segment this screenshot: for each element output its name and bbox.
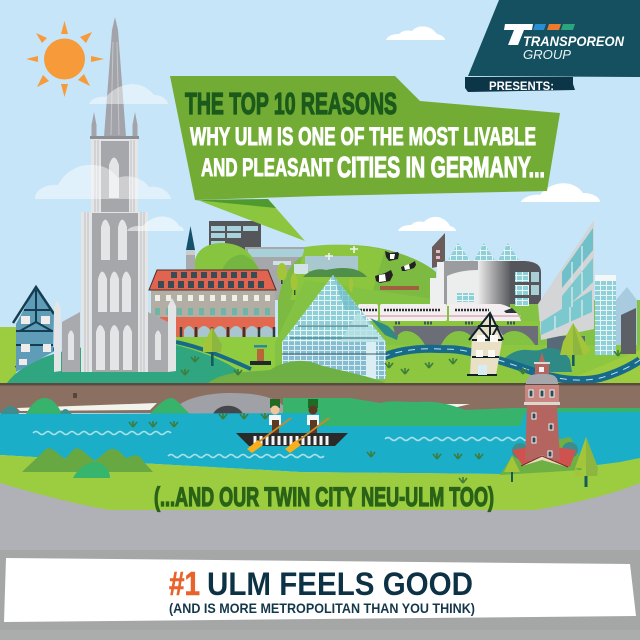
cows on the hill (375, 251, 416, 283)
wave lines (33, 432, 529, 458)
olive bushes left bank (22, 448, 153, 478)
Ulm Minster cathedral (54, 17, 176, 372)
rower (307, 399, 319, 434)
central modern building (430, 233, 541, 307)
lighthouse (500, 352, 582, 475)
half-timbered house left (13, 287, 54, 372)
mid green ground (0, 280, 640, 383)
cloud (398, 217, 456, 231)
road and trees midground (383, 323, 640, 380)
tree and small boat by the church (203, 327, 271, 366)
tuft on near bank (459, 477, 467, 483)
side naves (54, 298, 176, 372)
near bank of the river at the right (320, 412, 525, 426)
spire (90, 17, 139, 139)
stone wall (0, 383, 640, 413)
green hills front of church (7, 342, 385, 383)
cloud (127, 216, 184, 231)
number one: #1 (169, 565, 200, 602)
lower tower (81, 212, 148, 372)
far river bank (0, 398, 640, 414)
stone arch bridge (173, 393, 290, 414)
icon: logo mark (504, 24, 575, 45)
upper tower (91, 139, 138, 213)
half-timbered house centre (467, 313, 503, 375)
plant tufts on the meadow (181, 350, 622, 375)
small church spire (186, 226, 195, 275)
cloud (386, 26, 445, 40)
river (0, 412, 640, 474)
cloud (521, 183, 600, 202)
small trees on hill (277, 263, 353, 295)
cloud (89, 84, 168, 104)
presents ribbon (465, 77, 575, 93)
palace building (149, 270, 276, 338)
tree near lighthouse (504, 437, 598, 487)
wind turbines (325, 246, 358, 260)
background tower buildings (595, 275, 637, 355)
fence (380, 286, 419, 290)
headline: ULM FEELS GOOD (207, 566, 473, 602)
speech banner (170, 76, 560, 241)
white river strips (17, 403, 470, 411)
logo panel (468, 0, 640, 77)
subheadline: (AND IS MORE METROPOLITAN THAN YOU THINK) (169, 600, 475, 616)
icon: sun (26, 21, 104, 97)
cloud (35, 165, 171, 199)
line three: AND PLEASANT (201, 154, 333, 182)
glass pyramid (282, 275, 386, 379)
line three emphasis: CITIES IN GERMANY... (337, 152, 545, 184)
near river bank and road (0, 455, 640, 640)
water plants (129, 413, 483, 459)
heading: THE TOP 10 REASONS (185, 86, 397, 121)
far hill and buildings (195, 221, 436, 383)
company name: TRANSPOREON (523, 33, 625, 49)
footer white banner (4, 558, 636, 622)
rowing boat with two rowers (236, 399, 348, 453)
presents ribbon: PRESENTS: (489, 79, 554, 93)
viaduct (370, 318, 540, 345)
right glass building (538, 220, 594, 351)
footer band (0, 550, 640, 640)
rower (269, 399, 281, 434)
train (358, 304, 521, 321)
group: GROUP (523, 47, 571, 62)
